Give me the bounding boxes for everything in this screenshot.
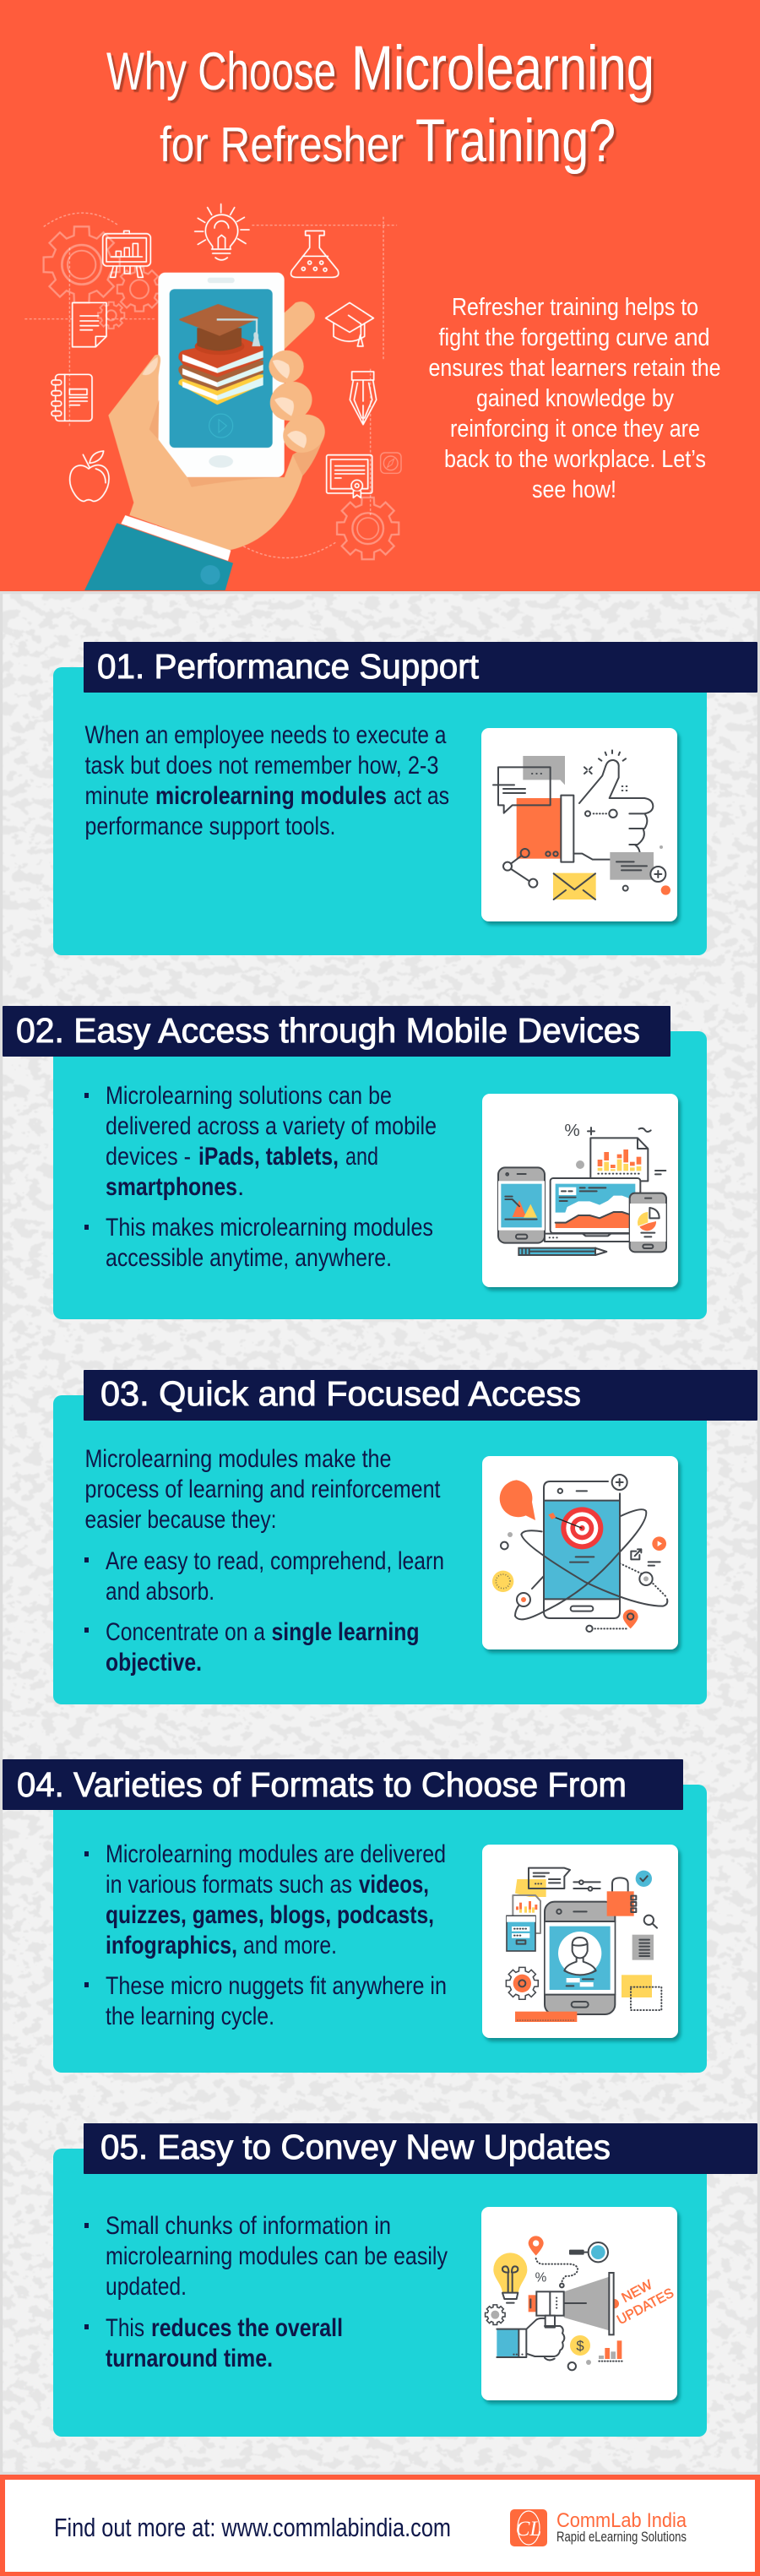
- body text: microlearning modules: [155, 782, 387, 810]
- image card: megaphone new updates: UPDATES: [615, 2286, 676, 2328]
- bulleted text: These micro nuggets fit anywhere in: [106, 1972, 447, 2000]
- body text: performance support tools.: [84, 812, 336, 840]
- intro text block: see how!: [532, 476, 616, 503]
- title: for Refresher: [160, 117, 404, 172]
- bulleted text: [84, 1082, 437, 1272]
- image card: megaphone new updates: [481, 2207, 677, 2400]
- panel: 01 Performance Support: [53, 642, 757, 955]
- intro text block: [429, 294, 721, 503]
- logo: CommLab India: Rapid eLearning Solutions: [556, 2529, 687, 2545]
- bulleted text: iPads, tablets,: [198, 1143, 339, 1171]
- title: [106, 33, 654, 175]
- heading bar: [84, 2123, 757, 2174]
- bulleted text: the learning cycle.: [106, 2003, 274, 2030]
- bulleted text: devices -: [106, 1143, 191, 1171]
- intro text block: ensures that learners retain the: [429, 355, 721, 382]
- index finger behind phone: [281, 302, 315, 352]
- heading bar: [84, 1370, 757, 1421]
- image card: mobile devices: %: [564, 1121, 580, 1140]
- call to action text: Find out more at: www.commlabindia.com: [54, 2513, 451, 2542]
- dashed guide lines: [24, 213, 397, 558]
- image card: megaphone new updates: NEW: [620, 2277, 655, 2306]
- bulleted text: reduces the overall: [151, 2314, 343, 2342]
- icon: notebook: [52, 374, 92, 421]
- intro text block: Refresher training helps to: [452, 294, 698, 321]
- intro text block: back to the workplace. Let’s: [444, 446, 706, 473]
- body text: easier because they:: [84, 1506, 277, 1534]
- bulleted text: This: [106, 2314, 144, 2342]
- panel: 02 Easy Access through Mobile Devices: [3, 1006, 707, 1319]
- logo: CommLab India: [510, 2509, 687, 2546]
- panel: orange header: [0, 0, 760, 591]
- body text: Microlearning modules make the: [84, 1445, 392, 1473]
- body text: act as: [394, 782, 449, 810]
- bulleted text: .: [237, 1173, 244, 1201]
- heading bar: [84, 642, 757, 693]
- body text: Are easy to read, comprehend, learn: [106, 1547, 444, 1575]
- panel: textured page background: [0, 591, 760, 2576]
- heading bar: 04. Varieties of Formats to Choose From: [17, 1765, 627, 1804]
- intro text block: gained knowledge by: [476, 385, 675, 412]
- bulleted text: and: [345, 1143, 378, 1171]
- title: Why Choose: [106, 42, 336, 101]
- heading bar: 05. Easy to Convey New Updates: [100, 2128, 611, 2166]
- icon: flask: [291, 231, 339, 277]
- panel: 03 Quick and Focused Access: [53, 1370, 757, 1704]
- illustration: hand holding phone with learning icons: [24, 204, 401, 590]
- body text: minute: [84, 782, 149, 810]
- icon: light bulb: [195, 204, 249, 260]
- image card: phone with formats: [482, 1845, 678, 2038]
- bulleted text: turnaround time.: [106, 2345, 273, 2372]
- bulleted text: updated.: [106, 2273, 187, 2301]
- panel: footer: [0, 2475, 760, 2576]
- image card: megaphone new updates: %: [535, 2271, 547, 2285]
- icon: document: [73, 302, 106, 347]
- body text: single learning: [272, 1618, 419, 1646]
- body text: and absorb.: [106, 1578, 214, 1606]
- body text: objective.: [106, 1649, 202, 1677]
- image card: megaphone new updates: $: [576, 2338, 584, 2354]
- image card: target on phone: [482, 1456, 678, 1649]
- heading bar: 03. Quick and Focused Access: [100, 1374, 581, 1413]
- icon: certificate: [327, 455, 372, 497]
- bulleted text: Microlearning solutions can be: [106, 1082, 392, 1110]
- heading bar: 02. Easy Access through Mobile Devices: [16, 1011, 640, 1050]
- panel: 04 Varieties of Formats to Choose From: [3, 1759, 707, 2073]
- bulleted text: quizzes, games, blogs, podcasts,: [106, 1901, 434, 1929]
- bulleted text: Microlearning modules are delivered: [106, 1840, 446, 1868]
- intro text block: reinforcing it once they are: [450, 416, 700, 443]
- body text: process of learning and reinforcement: [84, 1475, 441, 1503]
- icon: fountain pen: [350, 372, 377, 425]
- bulleted text: infographics,: [106, 1932, 237, 1959]
- bulleted text: This makes microlearning modules: [106, 1214, 433, 1242]
- image card: mobile devices: [482, 1094, 678, 1287]
- title: Microlearning: [351, 33, 654, 103]
- heading bar: 01. Performance Support: [97, 647, 480, 686]
- body text: Concentrate on a: [106, 1618, 265, 1646]
- icon: graduation cap: [326, 302, 373, 346]
- icon: apple: [70, 451, 109, 501]
- logo: CommLab India: CommLab India: [556, 2509, 687, 2532]
- intro text block: fight the forgetting curve and: [439, 324, 709, 351]
- bulleted text: videos,: [359, 1871, 429, 1899]
- bulleted text: smartphones: [106, 1173, 237, 1201]
- icon: smartphone: [158, 273, 285, 477]
- bulleted text: accessible anytime, anywhere.: [106, 1244, 392, 1272]
- bulleted text: and more.: [243, 1932, 337, 1959]
- bulleted text: microlearning modules can be easily: [106, 2242, 448, 2270]
- body text: [84, 1445, 444, 1677]
- title: Training?: [415, 108, 616, 175]
- fingers over phone: [263, 351, 331, 459]
- icon: faint gears: [44, 226, 401, 559]
- panel: 05 Easy to Convey New Updates: [53, 2123, 757, 2437]
- hand palm and thumb: [108, 355, 323, 551]
- bulleted text: delivered across a variety of mobile: [106, 1112, 437, 1140]
- icon: presentation easel: [103, 231, 150, 277]
- bulleted text: [84, 2212, 448, 2372]
- bulleted text: Small chunks of information in: [106, 2212, 391, 2240]
- body text: When an employee needs to execute a: [84, 721, 447, 749]
- body text: [84, 721, 449, 840]
- bulleted text: in various formats such as: [106, 1871, 352, 1899]
- image card: thumbs up: [481, 728, 677, 921]
- bulleted text: [84, 1840, 447, 2030]
- shirt cuff and sleeve: [84, 515, 233, 590]
- icon: books and graduation cap: [178, 305, 263, 405]
- logo: CommLab India: CL: [516, 2518, 541, 2541]
- body text: task but does not remember how, 2-3: [84, 752, 439, 780]
